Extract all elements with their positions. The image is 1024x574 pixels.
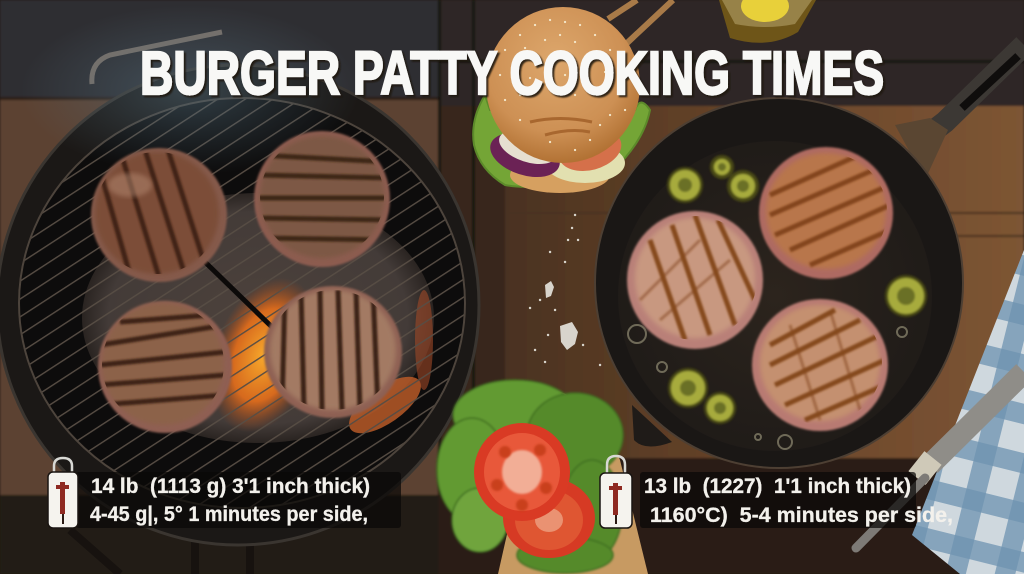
tomato bottom slice xyxy=(503,478,595,558)
salt sprinkle xyxy=(530,215,600,365)
spatula handle xyxy=(608,0,673,44)
caption background xyxy=(640,472,916,528)
coals xyxy=(82,193,434,443)
onion xyxy=(485,123,565,185)
skillet spout xyxy=(632,405,672,447)
patty 2 xyxy=(254,131,390,267)
patty 4 xyxy=(264,286,402,418)
bottom bun xyxy=(510,157,610,193)
tomato top slice xyxy=(474,423,570,521)
panel: cast-iron skillet with patties xyxy=(595,45,1024,468)
grill details line 1: 14 lb (1113 g) 3'1 inch thick) xyxy=(91,475,370,498)
panel: skillet instructions xyxy=(600,456,953,528)
wooden board xyxy=(498,388,648,574)
patty 7 xyxy=(752,299,888,431)
glass of oil xyxy=(719,0,816,43)
fire xyxy=(191,263,433,447)
caption background xyxy=(76,472,401,528)
skillet handle xyxy=(895,45,1024,180)
grill bowl xyxy=(0,65,479,545)
skillet details line 1: 13 lb (1227) 1'1 inch thick) xyxy=(644,475,911,498)
patty 1 xyxy=(91,148,227,282)
oil bubbles xyxy=(628,325,907,449)
grill details line 2: 4-45 g|, 5° 1 minutes per side, xyxy=(90,503,368,526)
patty 5 xyxy=(759,147,893,279)
metal utensil xyxy=(856,372,1024,548)
grill legs xyxy=(70,530,250,574)
grate xyxy=(19,98,465,508)
lettuce xyxy=(473,95,650,187)
grill handle xyxy=(92,32,222,84)
kitchen towel xyxy=(912,250,1024,574)
lettuce leaves xyxy=(437,380,623,573)
pickle slices xyxy=(667,155,927,424)
panel: lettuce and tomato on board xyxy=(437,380,648,574)
icon: thermometer tag xyxy=(48,458,78,528)
panel: burger xyxy=(473,0,673,193)
panel: charcoal grill with patties xyxy=(0,5,479,574)
patty 3 xyxy=(98,301,232,433)
cheese xyxy=(545,143,625,183)
top bun xyxy=(486,7,640,163)
skillet body xyxy=(595,98,963,468)
tomato slice xyxy=(554,122,626,178)
skillet details line 2: 1160°C) 5-4 minutes per side, xyxy=(650,504,953,527)
icon: thermometer tag xyxy=(600,456,632,528)
panel: grill instructions xyxy=(48,458,401,528)
patty 6 xyxy=(627,211,763,349)
smoke xyxy=(20,5,360,175)
